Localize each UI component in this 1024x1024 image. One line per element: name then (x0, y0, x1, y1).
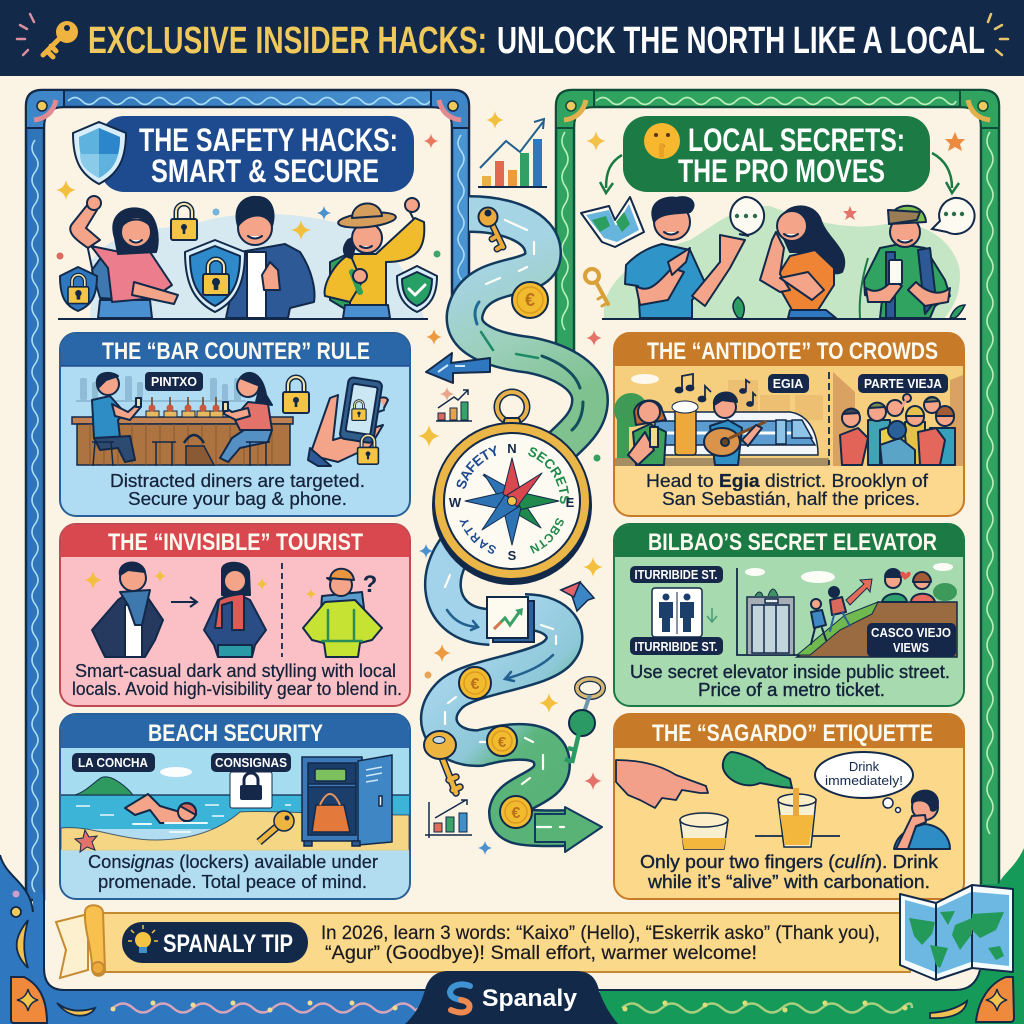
speech bubble (815, 752, 913, 798)
dashed divider (828, 372, 830, 465)
tourist in neon: ? (363, 571, 377, 598)
paper plane (561, 582, 594, 611)
scene: beach (61, 748, 409, 852)
heading: local secrets (623, 116, 930, 192)
scene: beach: LA CONCHA (78, 756, 148, 770)
bottom-left blue border band (0, 855, 430, 1024)
crowd (840, 394, 955, 465)
illustration: safety trio (56, 134, 440, 319)
card: beach security: BEACH SECURITY (148, 720, 323, 747)
spanaly tip banner: “Agur” (Goodbye)! Small effort, warmer welcome! (325, 943, 757, 964)
compass labels: SECRETS (528, 447, 570, 504)
padlock (171, 204, 197, 240)
compass labels: N (507, 441, 517, 456)
chart card on road (487, 597, 534, 642)
scene: beach: CONSIGNAS (215, 756, 287, 770)
card: beach security (60, 714, 410, 899)
card: bilbao secret elevator: Use secret elevator inside public street. (630, 661, 950, 682)
card: invisible tourist: locals. Avoid high-visibility gear to blend in. (72, 678, 402, 699)
scene: pouring cider (616, 752, 950, 849)
corner tile (976, 977, 1014, 1022)
card: bilbao secret elevator: Price of a metro ticket. (698, 679, 885, 700)
scroll end (56, 905, 105, 978)
icon: shushing face (644, 123, 680, 159)
pointing hand (616, 760, 708, 808)
climbers and arrow (811, 587, 850, 644)
viewers (882, 569, 935, 602)
beer glass (672, 401, 698, 455)
scene: elevator and hill: ITURRIBIDE ST. (634, 640, 718, 654)
icon: elevator sign (652, 588, 702, 637)
card: beach security: Consignas (lockers) available under (88, 851, 378, 872)
heading: the safety hacks: THE SAFETY HACKS: (139, 122, 398, 158)
island (75, 777, 133, 795)
center chart: rising bars (478, 119, 547, 187)
handbag (184, 435, 214, 465)
label (145, 372, 203, 391)
tip pill (122, 922, 308, 963)
scene: elevator and hill: VIEWS (893, 641, 929, 655)
scene: elevator and hill (630, 563, 957, 657)
title banner (0, 0, 1024, 76)
gold key (424, 731, 460, 793)
key on road (478, 208, 503, 249)
pintxos (146, 411, 223, 417)
tip text: In 2026, learn 3 words: “Kaixo” (Hello), “Eskerrik asko” (Thank you), (321, 923, 880, 944)
scene: bar (72, 372, 388, 466)
scene: pouring cider: Drink (849, 759, 880, 774)
shield with padlock (60, 267, 97, 311)
card: sagardo etiquette (614, 714, 964, 899)
winding road: upper (465, 214, 590, 447)
woman with backpack (70, 196, 178, 318)
card: sagardo etiquette: while it’s “alive” with carbonation. (647, 871, 930, 892)
panel frame: local secrets (556, 90, 999, 890)
bottom chart (425, 800, 472, 838)
panel frame: safety hacks (26, 90, 469, 900)
stools (92, 442, 270, 466)
speech bubble (932, 198, 975, 234)
map (581, 197, 644, 247)
heading: the safety hacks: SMART & SECURE (151, 153, 379, 189)
card: antidote to crowds: San Sebastián, half the prices. (662, 488, 920, 509)
icon: golden key (43, 21, 78, 57)
green key (565, 679, 603, 763)
compass labels: SARTY (459, 520, 496, 554)
woman with hat (325, 198, 424, 318)
compass rose (465, 458, 559, 545)
heading: the safety hacks (73, 116, 414, 192)
winding road: lower (439, 530, 602, 852)
euro coins: € (471, 676, 480, 693)
heading: local secrets: THE PRO MOVES (678, 153, 885, 189)
key (585, 269, 608, 306)
small chart (436, 390, 472, 421)
thinking man (894, 791, 950, 849)
starfish (75, 830, 97, 852)
card: sagardo etiquette: THE “SAGARDO” ETIQUETTE (652, 720, 933, 747)
card: invisible tourist: Smart-casual dark and stylling with local (75, 660, 396, 681)
card: bar counter rule (60, 333, 410, 516)
label (867, 623, 956, 657)
card: beach security: promenade. Total peace of mind. (98, 871, 367, 892)
man with shield (185, 197, 314, 318)
man in dark coat (92, 563, 163, 657)
woman with beer (628, 400, 666, 465)
heading: local secrets: LOCAL SECRETS: (688, 122, 905, 158)
dashed divider (281, 563, 283, 657)
card: invisible tourist: THE “INVISIBLE” TOURIST (108, 529, 363, 556)
shield with check (397, 266, 437, 312)
left arrow (426, 353, 490, 383)
tourist in neon (303, 569, 382, 657)
coin (512, 282, 548, 318)
compass (432, 388, 592, 585)
music notes (676, 374, 756, 406)
spanaly logo tab: Spanaly (482, 985, 578, 1012)
scene: elevator and hill: ITURRIBIDE ST. (634, 568, 718, 582)
compass labels: SAFETY (456, 445, 496, 489)
scene: Egia and Parte Vieja (614, 366, 963, 466)
labels (768, 374, 809, 393)
scene: Egia and Parte Vieja: EGIA (773, 377, 803, 391)
card: antidote to crowds (614, 333, 964, 516)
illustration: local friends talking (581, 131, 975, 319)
card: bilbao secret elevator: BILBAO’S SECRET ELEVATOR (648, 529, 937, 556)
compass labels (448, 441, 575, 563)
train (655, 412, 818, 455)
hill (797, 602, 957, 657)
guitarist (704, 393, 765, 465)
left glass (680, 813, 728, 849)
left border ornaments (11, 890, 419, 1023)
icon: S logo (450, 984, 470, 1012)
bottle (723, 752, 792, 788)
icon: light bulb (128, 925, 158, 953)
label: PINTXO (151, 375, 197, 389)
card: antidote to crowds: THE “ANTIDOTE” TO CROWDS (647, 338, 938, 365)
euro coins: € (498, 734, 507, 751)
compass labels: SBCTN (530, 518, 564, 554)
scene: pouring cider: immediately! (825, 773, 903, 788)
card: bar counter rule: Secure your bag & phone. (128, 488, 347, 509)
card: bar counter rule: Distracted diners are targeted. (110, 470, 365, 491)
key (259, 811, 294, 842)
card: antidote to crowds: Head to Egia district. Brooklyn of (646, 470, 929, 491)
compass labels: S (508, 548, 517, 563)
compass labels: E (566, 495, 575, 510)
elevator (747, 597, 794, 655)
woman whispering (760, 206, 844, 318)
scene: outfits (84, 563, 382, 657)
coin: € (525, 290, 535, 310)
title text: EXCLUSIVE INSIDER HACKS: (88, 20, 487, 62)
hand and phone (308, 377, 388, 466)
woman in navy coat (204, 563, 266, 657)
icon: shield (73, 122, 126, 184)
card: sagardo etiquette: Only pour two fingers ( culín). Drink (640, 851, 939, 872)
man pointing (625, 197, 745, 318)
scene: elevator and hill: CASCO VIEJO (871, 626, 951, 640)
center sparkles (418, 111, 603, 855)
lock (283, 377, 309, 413)
compass labels: W (449, 495, 462, 510)
curved arrows (600, 153, 959, 193)
inner page outline (0, 855, 980, 990)
arrow (171, 597, 197, 607)
speech bubble (730, 197, 764, 236)
diners (92, 373, 272, 462)
folded world map (900, 885, 1013, 980)
labels (72, 753, 155, 772)
euro coins (459, 667, 532, 828)
euro coins: € (512, 805, 521, 822)
locker (302, 755, 392, 846)
tip pill: SPANALY TIP (163, 930, 293, 958)
scene: Egia and Parte Vieja: PARTE VIEJA (864, 377, 942, 391)
swimmer (125, 794, 207, 832)
spanaly tip banner (56, 905, 910, 978)
man with cap (864, 206, 950, 318)
spanaly logo tab (405, 971, 618, 1024)
corner tile (11, 977, 47, 1023)
right glass (778, 794, 816, 847)
card: bilbao secret elevator (614, 524, 964, 706)
bottom-right green border band (600, 848, 1024, 1024)
right border ornaments (622, 977, 1014, 1022)
card: bar counter rule: THE “BAR COUNTER” RULE (102, 338, 370, 365)
card: invisible tourist (60, 524, 410, 706)
